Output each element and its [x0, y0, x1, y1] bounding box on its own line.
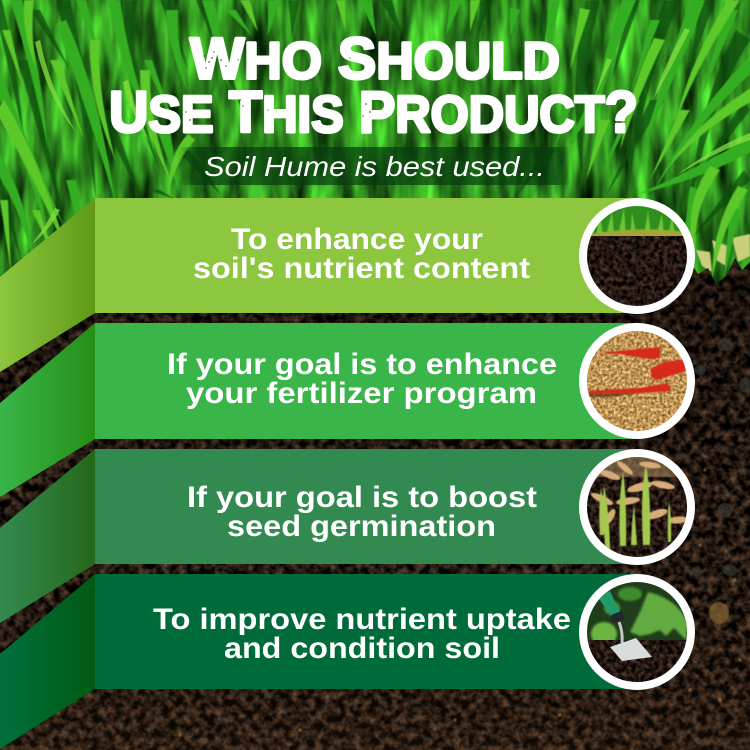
- panel: seed germination: [0, 449, 640, 623]
- panel: fertilizer program: [0, 323, 640, 497]
- panel: soil nutrient content: soil's nutrient content: [193, 252, 530, 285]
- title: USE THIS PRODUCT?: [109, 80, 638, 145]
- icon: fertilizer granules with red scoop: [579, 323, 695, 439]
- grass background: [0, 0, 750, 285]
- soil background: [0, 255, 750, 750]
- panel: soil nutrient content: To enhance your: [231, 223, 483, 256]
- panel: seed germination: If your goal is to boost: [187, 481, 537, 514]
- panel: soil nutrient content: [0, 198, 640, 372]
- icon: trowel in soil with plant: [579, 574, 695, 690]
- panel: fertilizer program: your fertilizer program: [186, 377, 537, 410]
- panel: fertilizer program: If your goal is to enhance: [167, 348, 557, 381]
- icon: germinating seeds: [579, 449, 695, 565]
- title: WHO SHOULD: [190, 26, 560, 92]
- panel: nutrient uptake: [0, 574, 640, 749]
- panel: nutrient uptake: and condition soil: [224, 632, 500, 665]
- title: [109, 26, 638, 145]
- icon: grass over soil: [579, 198, 695, 314]
- subtitle: Soil Hume is best used...: [204, 151, 545, 182]
- subtitle backing strip: [178, 147, 572, 185]
- panel: nutrient uptake: To improve nutrient uptake: [153, 603, 571, 636]
- panel: seed germination: seed germination: [227, 510, 496, 543]
